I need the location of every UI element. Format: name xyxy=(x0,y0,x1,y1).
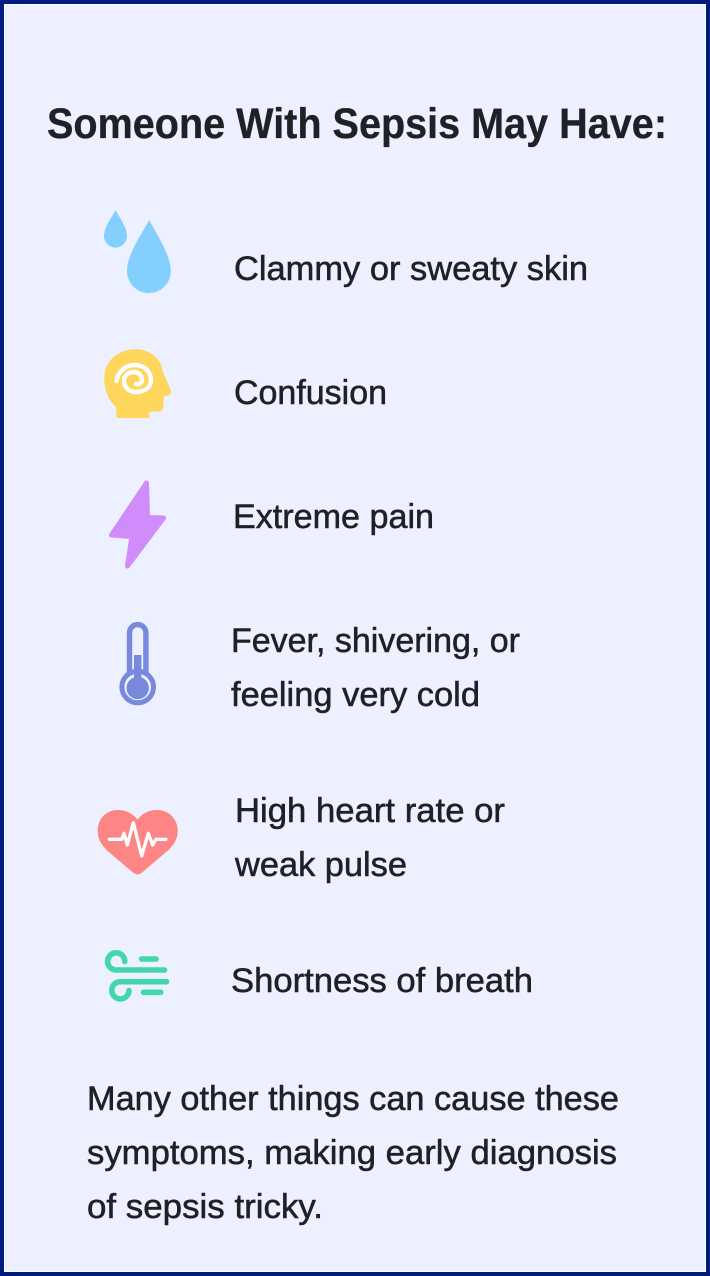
icon: thermometer xyxy=(122,625,154,703)
symptom: clammy or sweaty skin: Clammy or sweaty skin xyxy=(234,250,588,288)
closing note: symptoms, making early diagnosis xyxy=(87,1134,617,1172)
symptom: fever, shivering, or feeling very cold: feeling very cold xyxy=(231,676,480,714)
symptom: high heart rate or weak pulse xyxy=(234,792,505,884)
symptom: fever, shivering, or feeling very cold xyxy=(231,622,520,714)
icon: heart with pulse line xyxy=(98,810,178,874)
icon: wind xyxy=(108,953,166,999)
symptom: fever, shivering, or feeling very cold: Fever, shivering, or xyxy=(231,622,520,660)
icon: head with spiral xyxy=(104,349,171,418)
closing note: Many other things can cause these xyxy=(87,1080,619,1118)
symptom: shortness of breath: Shortness of breath xyxy=(231,962,533,1000)
icon: lightning bolt xyxy=(112,483,164,566)
symptom: confusion: Confusion xyxy=(234,374,387,412)
closing note: of sepsis tricky. xyxy=(87,1188,323,1226)
title: Someone With Sepsis May Have: xyxy=(47,101,667,148)
icon: water drops xyxy=(104,210,171,293)
closing note xyxy=(87,1080,619,1226)
symptom: high heart rate or weak pulse: High heart rate or xyxy=(235,792,505,830)
symptom: extreme pain: Extreme pain xyxy=(233,498,434,536)
symptom: high heart rate or weak pulse: weak pulse xyxy=(234,846,407,884)
